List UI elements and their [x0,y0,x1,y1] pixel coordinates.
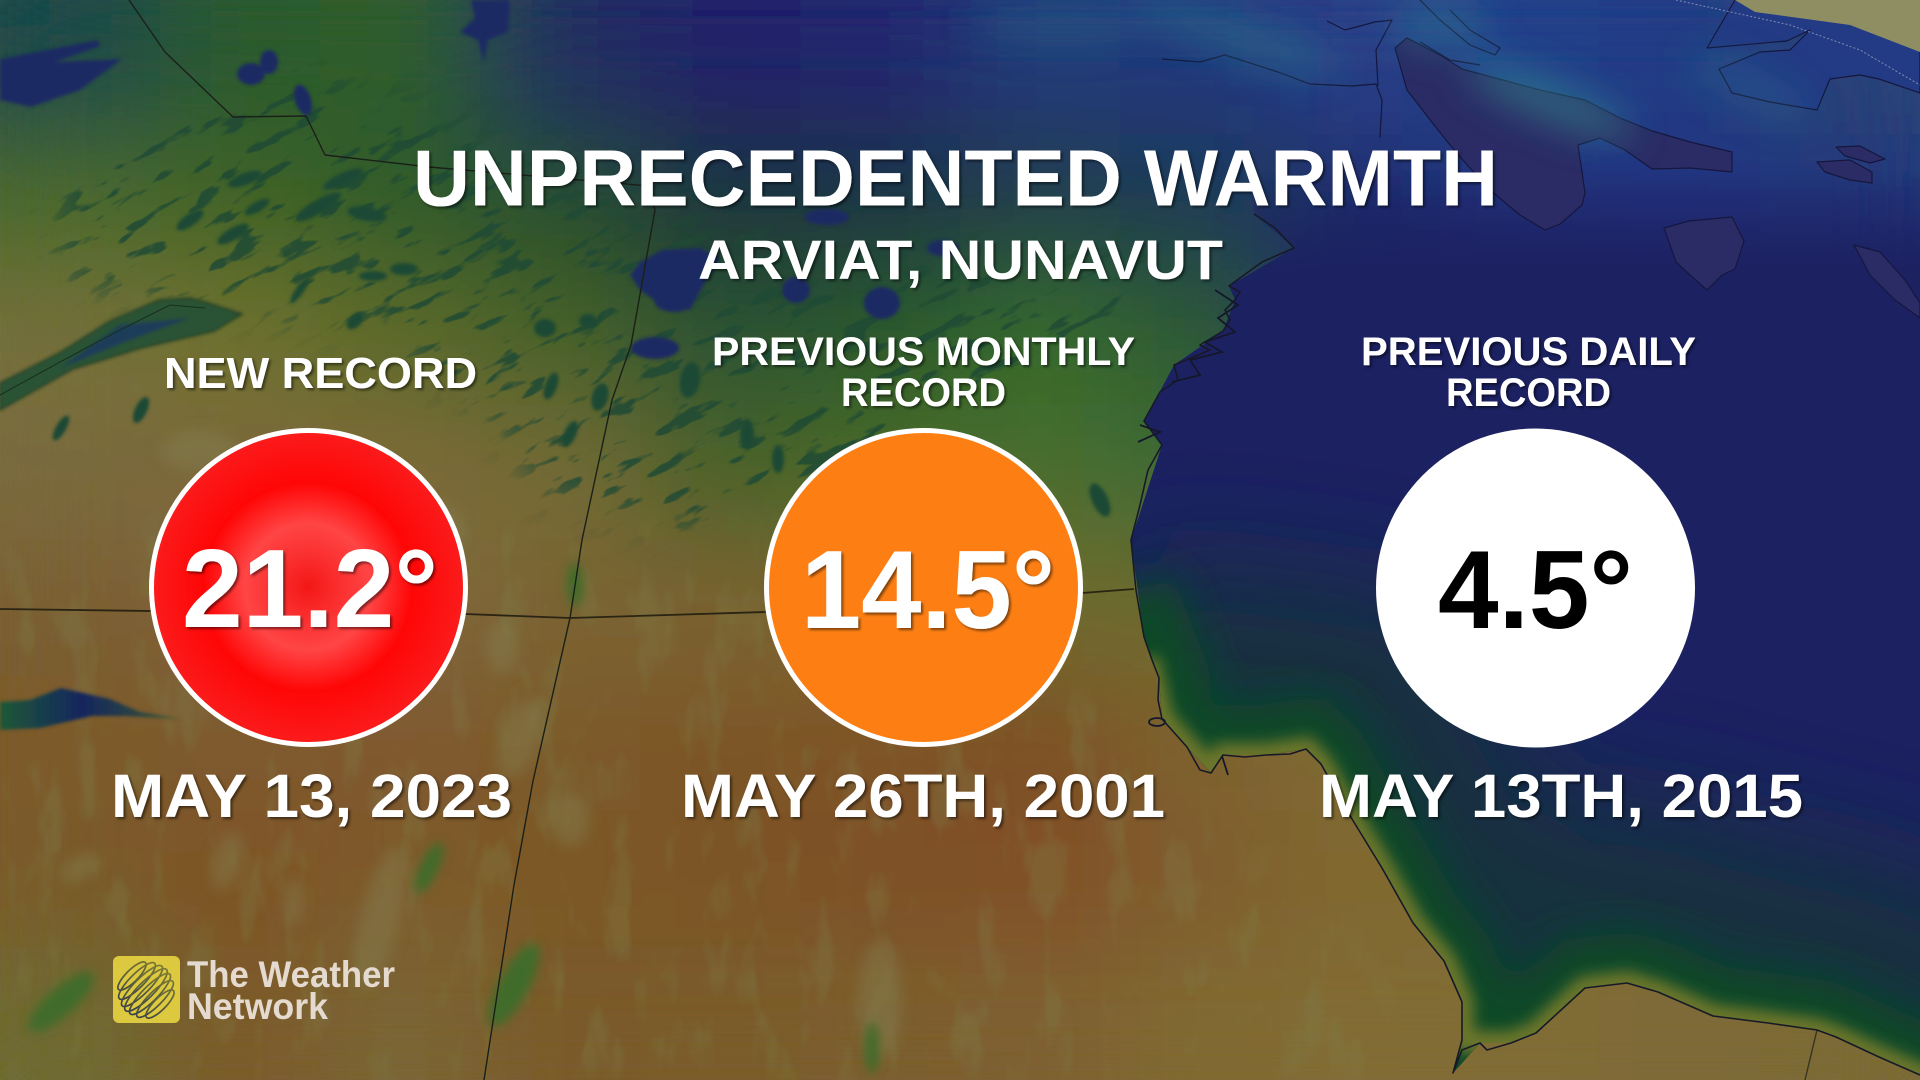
icon: globe badge [113,956,180,1023]
temperature: 21.2 degrees: 21.2° [182,527,438,651]
warm-land dark lakes in the south [20,563,879,1074]
wordmark: The Weather [187,954,395,995]
region of small lakes [50,164,1115,520]
warm water fade along the south coast [1144,640,1920,1075]
navy northern lakes [0,0,959,359]
label: previous daily record: RECORD [1446,371,1611,415]
label: previous monthly record: RECORD [841,371,1006,415]
land patches: olive and pale [55,430,902,1060]
date: May 13th, 2015: MAY 13TH, 2015 [1319,762,1803,830]
label: new record: NEW RECORD [164,349,477,398]
circle: red temperature [152,430,466,744]
temperature: 4.5 degrees: 4.5° [1438,528,1633,652]
title: UNPRECEDENTED WARMTH [413,134,1498,222]
lake: Great Slave [0,298,242,410]
panel: previous monthly record [681,330,1165,830]
circle: orange temperature [766,430,1080,744]
lake: Athabasca [0,688,181,730]
wordmark: Network [187,986,328,1027]
date: May 26th, 2001: MAY 26TH, 2001 [681,762,1165,830]
Hudson Bay [1131,170,1920,1075]
jagged Nunavut shore islets [1138,290,1238,775]
teal warm streaks [970,0,1823,152]
label: previous daily record: PREVIOUS DAILY [1361,330,1696,374]
far north land corner [1676,0,1920,85]
subtitle: ARVIAT, NUNAVUT [698,228,1223,291]
lake speckle texture [49,81,1142,540]
logo: The Weather Network [113,954,395,1027]
label: previous monthly record: PREVIOUS MONTHLY [712,330,1135,374]
circle: white temperature [1376,428,1695,748]
date: May 13, 2023: MAY 13, 2023 [111,762,512,830]
Arctic islands [1395,0,1920,318]
north-west coast lines [1162,0,1500,138]
panel: previous daily record [1319,330,1803,830]
bay coastline [1131,214,1920,1075]
panel: new record [111,349,512,830]
temperature: 14.5 degrees: 14.5° [801,528,1055,652]
mottled pale texture on warm land [22,590,1256,1068]
